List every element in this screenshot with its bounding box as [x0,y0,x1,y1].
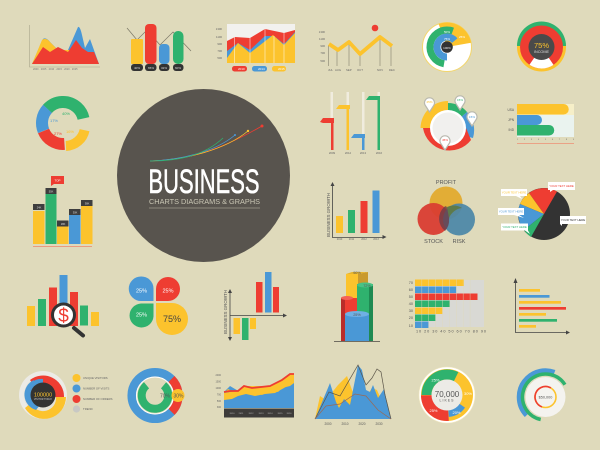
stacked area chart wide: 2016 [287,413,292,415]
bar chart with top flag: 24K [37,206,42,210]
stacked area chart wide: 2011 [239,413,244,415]
four petal percentages: 25% [162,288,174,294]
donut: 75% income [517,21,566,71]
likes donut: 25% [429,408,438,413]
stacked area chart with legend: 900 [217,42,222,46]
concentric 70/30 donut [122,363,188,428]
line chart with marker: DEC [389,68,395,72]
3D bars: 72% [363,284,371,288]
subtitle: CHARTS DIAGRAMS & GRAPHS [149,197,260,206]
venn diagram: STOCK [424,239,443,245]
segmented donut: left: 16% [66,129,74,134]
pill value labels: 40% [134,66,140,70]
stacked area chart with legend: 1100 [216,35,222,39]
likes donut: 20% [452,410,461,415]
growth bar chart: BUSINESS GROWTH [326,193,331,237]
growth bar chart: 2010 [337,238,343,241]
likes donut: 70,000 [435,390,460,399]
donut: nested rings 100%: 100% [443,46,451,50]
callouts: YOUR TEXT HERE [561,218,585,222]
concentric 70/30 donut: 70% [160,394,171,400]
pill value labels: 65% [148,66,154,70]
legend: 2014 [258,67,265,71]
callouts: YOUR TEXT HERE [549,184,574,188]
grid bars table: 10 [409,324,413,328]
concentric 70/30 donut: 30% [173,394,184,400]
legend: UNIQUE VISITORS [83,376,108,380]
grid bars table: 30 [409,309,413,313]
legend: 2010 [238,67,245,71]
venn diagram [418,180,475,245]
donut: nested rings 100%: 50% [444,30,450,34]
mountain area chart: 2010 [341,422,349,426]
stacked area chart wide: 1000 [215,387,222,390]
stacked area chart with legend: 500 [217,56,222,60]
stacked area chart wide: 500 [217,400,222,403]
line chart with marker: AUG [335,68,341,72]
bar chart with top flag: 30K [73,210,78,214]
bar chart with top flag: 38K [85,202,90,206]
arc rings $50,000: $50,000 [539,396,552,400]
pill bar chart: top [127,24,191,71]
3D bars [334,271,380,342]
stacked area chart wide: 2014 [268,413,273,415]
grid bars table: 40 [409,302,413,306]
mountain area chart: 2030 [375,422,383,426]
horizontal bars USA JPN IND: 1 2 3 4 5 6 7 8 9 [517,139,575,141]
venn diagram: RISK [453,239,466,245]
likes donut [419,367,475,423]
growth curves [150,124,264,161]
four petal percentages: 25% [136,312,147,318]
legend [232,66,286,72]
mountain area chart [315,365,391,426]
line chart with marker: 500 [320,59,325,63]
legend: TREND [83,407,93,411]
callouts: YOUR TEXT HERE [502,190,526,194]
growth chart with negative bars [223,272,287,341]
3D bars: 90% [353,271,361,275]
donut: 75% income: INCOME [534,50,550,54]
grid bars table: 20 [409,316,413,320]
magnifier bar chart [27,275,99,336]
callouts: YOUR TEXT HERE [502,225,527,229]
line chart with marker: 700 [320,51,325,55]
grid bars table [409,279,486,334]
horizontal bars USA JPN IND: USA [507,108,515,112]
line chart with marker: SEP [346,68,352,72]
pill value labels [131,64,184,71]
legend [72,374,113,413]
ring with map pins: 15% [457,98,463,102]
visitors donut with legend [19,371,113,419]
stacked area chart wide: 1500 [215,380,222,384]
ring with map pins [420,96,477,151]
bar chart with top flag [33,176,92,247]
horizontal bars USA JPN IND: JPN [508,118,515,122]
bar chart with top flag: 18K [61,222,66,226]
stacked area chart with legend: 1300 [216,27,222,31]
central circle with title [117,89,290,262]
growth bar chart: 2012 [361,238,367,241]
mountain area chart: 2020 [358,422,366,426]
title: BUSINESS [148,163,260,201]
callouts: YOUR TEXT HERE [499,210,523,214]
segmented donut: left: 17% [50,118,58,123]
ring with map pins: 45% [442,138,448,142]
line chart with marker: 1100 [319,37,325,41]
stacked area chart wide: 2010 [230,413,235,415]
pins [424,96,477,150]
donut: nested rings 100%: 25% [459,35,465,39]
segmented donut: left: 40% [62,111,70,116]
vertical flag bars: 2012 [345,151,352,155]
legend: NUMBER OF VISITS [83,386,110,390]
likes donut: 30% [464,391,472,396]
stacked area chart wide: 300 [217,406,222,409]
horizontal bars USA JPN IND [507,104,575,144]
mountain area chart: 2000 [324,422,332,426]
callouts [498,182,586,234]
line chart with marker: 900 [320,44,325,48]
grid bars table: 10 20 30 40 50 60 70 80 90 [416,330,486,334]
donut: nested rings 100%: 75% [444,37,450,41]
grid bars table: 70 [409,281,413,285]
line chart with marker: OCT [357,68,363,72]
vertical flag bars: 2016 [376,151,383,155]
area chart: top left [30,25,100,71]
four petal percentages [129,276,188,335]
pill value labels: 60% [175,66,181,70]
line chart with marker [319,25,395,72]
segmented donut: left [33,93,93,153]
stacked area chart wide: 2000 [215,374,222,377]
bar chart with top flag: 55K [49,190,54,194]
vertical flag bars [320,92,383,155]
line chart with marker: JUL [328,68,333,72]
grid bars table: 50 [409,295,413,299]
ring with map pins: 25% [426,100,433,104]
line chart with marker: NOV [377,68,383,72]
four petal percentages: 25% [136,288,147,294]
visitors donut with legend: 100000 [34,392,52,398]
four petal percentages: 75% [163,314,181,324]
growth chart with negative bars: BUSINESS GROWTH [223,290,228,334]
area chart: top left: 2000 · 2005 · 2010 · 2015 · 2020 · 2025 [33,68,78,71]
ring with map pins: 15% [469,115,475,119]
donut: 75% income: 75% [534,41,549,50]
venn diagram: PROFIT [436,180,457,186]
likes donut: 25% [431,378,440,382]
growth bar chart: 2011 [349,238,355,241]
stacked area chart wide: 2012 [249,413,254,415]
pie chart with callouts [498,182,586,240]
stacked area chart wide: 2013 [259,413,264,415]
stacked area chart wide: 2015 [278,413,283,415]
segmented donut: left: 27% [54,131,62,136]
donut: nested rings 100% [422,22,472,72]
arc rings $50,000 [508,360,583,434]
horizontal bars with axes [514,278,570,334]
stacked area chart wide [215,373,294,418]
stacked area chart with legend: 700 [217,49,222,53]
legend: NUMBER OF ORDERS [83,397,113,401]
pill value labels: 32% [161,66,167,70]
bar chart with top flag: TOP [54,178,61,182]
horizontal bars USA JPN IND: IND [508,128,515,132]
stacked area chart wide: 700 [217,394,222,396]
stacked area chart with legend [216,24,295,72]
visitors donut with legend: VISITOR TODAY [34,398,52,401]
grid bars table: 60 [409,288,413,292]
likes donut: LIKES [440,398,454,402]
line chart with marker: 1300 [319,30,325,34]
vertical flag bars: 2009 [329,151,336,155]
3D bars: 25% [353,313,361,317]
growth bar chart [326,182,386,241]
vertical flag bars: 2013 [360,151,367,155]
growth bar chart: 2013 [373,238,379,241]
icon: magnifying glass with dollar: $ [58,306,69,327]
legend: 2015 [278,67,285,71]
